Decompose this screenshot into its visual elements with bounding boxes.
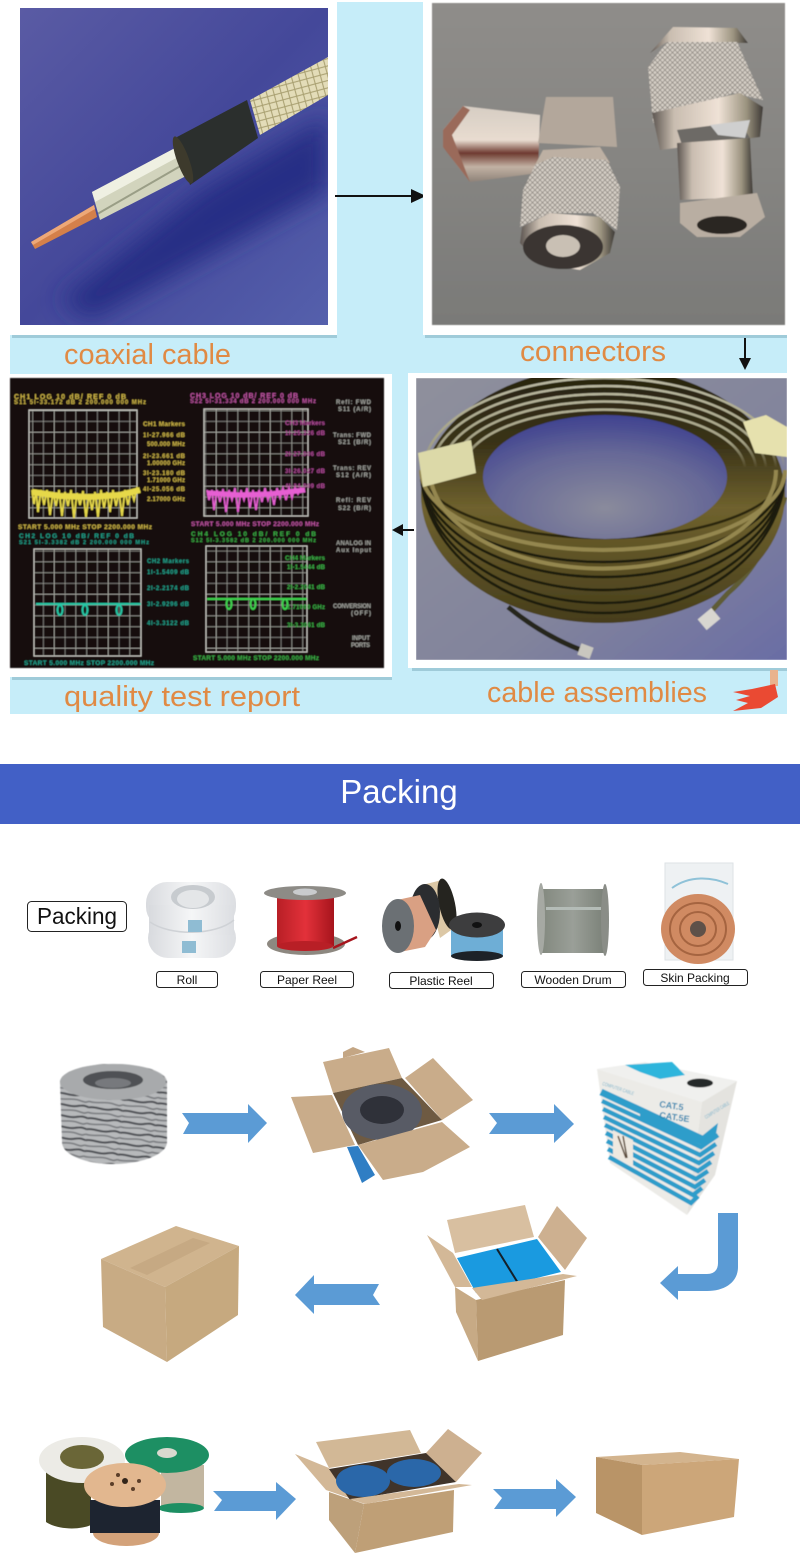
label: Plastic Reel xyxy=(390,972,494,988)
label: cable assemblies: cable assemblies xyxy=(487,677,707,709)
analyzer softkey menu: Trans: REV xyxy=(333,466,371,472)
analyzer softkey menu: (OFF) xyxy=(351,611,371,617)
icon: open box with blue cartons xyxy=(427,1205,587,1361)
icon: blue striped cat carton xyxy=(597,1062,737,1215)
icon: blue striped cat carton: COMPUTER CABLE xyxy=(704,1101,731,1121)
chart: channel 1 yellow trace: 500.000 MHz xyxy=(147,442,185,448)
icon: roll xyxy=(146,882,236,958)
panel: packing flow two xyxy=(39,1429,739,1553)
chart: channel 2 teal trace: S21 5I-3.3382 dB 2 200.000 000 MHz xyxy=(19,540,149,546)
chart: channel 4 green trace: 1.71000 GHz xyxy=(287,605,325,611)
label: Wooden Drum: Wooden Drum xyxy=(534,973,612,987)
chart: channel 3 magenta trace: S22 5I-31.334 dB 2 200.000 000 MHz xyxy=(190,399,316,405)
label: Skin Packing: Skin Packing xyxy=(660,971,730,985)
chart: channel 3 magenta trace: CH3 Markers xyxy=(285,420,325,427)
photo: coaxial cable xyxy=(20,8,328,325)
label: Packing tag: Packing xyxy=(37,903,117,929)
arrow: box to carton xyxy=(493,1479,576,1517)
chart: channel 1 yellow trace: 1.71000 GHz xyxy=(147,478,185,484)
chart: channel 2 teal trace: CH2 LOG 10 dB/ REF 0 dB xyxy=(19,533,134,540)
chart: channel 2 teal trace: 1I-1.5409 dB xyxy=(147,570,190,576)
icon: blue striped cat carton: CAT.5E xyxy=(659,1110,690,1124)
chart: channel 1 yellow trace: 2I-23.661 dB xyxy=(143,454,186,460)
photo: analyzer screen xyxy=(10,378,384,668)
chart: channel 1 yellow trace: 4I-25.056 dB xyxy=(143,487,186,493)
analyzer softkey menu: CONVERSION xyxy=(333,604,371,610)
analyzer softkey menu: INPUT xyxy=(352,636,370,642)
chart: channel 3 magenta trace: CH3 LOG 10 dB/ REF 0 dB xyxy=(190,393,298,400)
analyzer softkey menu: S22 (B/R) xyxy=(338,506,371,512)
label: coaxial cable: coaxial cable xyxy=(64,339,231,371)
label: Plastic Reel: Plastic Reel xyxy=(409,974,473,988)
icon: blue striped cat carton: COMPUTER CABLE xyxy=(601,1081,635,1097)
analyzer softkey menu: Refl: FWD xyxy=(336,400,372,406)
chart: channel 2 teal trace: 4I-3.3122 dB xyxy=(147,621,190,627)
analyzer softkey menu: Trans: FWD xyxy=(333,433,372,439)
icon: paper reel xyxy=(264,886,357,955)
label: quality test report: quality test report xyxy=(64,681,300,713)
analyzer softkey menu: PORTS xyxy=(351,643,370,649)
arrow: connectors to assemblies xyxy=(739,338,751,370)
arrow: assemblies to test report xyxy=(392,524,414,536)
heading band: Packing xyxy=(0,764,800,824)
icon: closed box xyxy=(101,1226,239,1362)
arrow: curved from carton down xyxy=(660,1213,738,1300)
chart: channel 4 green trace: CH4 LOG 10 dB/ REF 0 dB xyxy=(191,531,316,538)
label: Skin Packing xyxy=(644,970,748,986)
panel: packing types xyxy=(28,863,748,988)
panel: coaxial cable xyxy=(10,0,337,371)
chart: channel 1 yellow trace: 1.00000 GHz xyxy=(147,461,185,467)
chart: channel 4 green trace: START 5.000 MHz STOP 2200.000 MHz xyxy=(193,655,320,662)
chart: channel 4 green trace xyxy=(191,531,326,662)
analyzer softkey menu: S12 (A/R) xyxy=(336,473,371,479)
chart: channel 4 green trace: 2I-2.2041 dB xyxy=(287,585,326,591)
icon: open box with coil xyxy=(291,1047,473,1183)
arrow: coil to box xyxy=(182,1104,267,1143)
chart: channel 3 magenta trace: 3I-26.027 dB xyxy=(285,469,326,475)
analyzer softkey menu: S21 (B/R) xyxy=(338,440,371,446)
panel: packing flow one xyxy=(60,1047,738,1362)
icon: skin packing xyxy=(661,863,735,964)
chart: channel 1 yellow trace: CH1 LOG 10 dB/ REF 0 dB xyxy=(14,394,126,401)
chart: channel 3 magenta trace: 1I-25.326 dB xyxy=(285,431,326,437)
arrow: cable to connectors xyxy=(335,189,426,203)
label: Paper Reel xyxy=(260,972,354,988)
chart: channel 1 yellow trace: 1I-27.966 dB xyxy=(143,433,186,439)
panel: connectors xyxy=(423,0,787,368)
arrow: box to cat carton xyxy=(489,1104,574,1143)
chart: channel 3 magenta trace xyxy=(190,393,326,528)
chart: channel 1 yellow trace: 2.17000 GHz xyxy=(147,497,185,503)
light blue process background xyxy=(10,2,787,714)
analyzer softkey menu: ANALOG IN xyxy=(336,541,371,547)
label: Wooden Drum xyxy=(522,972,626,988)
icon: wire coil xyxy=(60,1064,167,1164)
chart: channel 4 green trace: 3I-3.3061 dB xyxy=(287,623,326,629)
chart: channel 2 teal trace: CH2 Markers xyxy=(147,559,190,565)
icon: open box with reels xyxy=(295,1429,482,1553)
analyzer softkey menu: Aux Input xyxy=(336,548,371,554)
analyzer softkey menu: Refl: REV xyxy=(336,498,371,504)
photo: connectors xyxy=(432,3,785,325)
chart: channel 3 magenta trace: START 5.000 MHz STOP 2200.000 MHz xyxy=(191,521,320,528)
icon: assorted reels xyxy=(39,1437,209,1546)
heading band: Packing: Packing xyxy=(340,773,458,810)
chart: channel 2 teal trace: START 5.000 MHz STOP 2200.000 MHz xyxy=(24,660,155,667)
icon: pointing hand xyxy=(733,670,778,711)
chart: channel 3 magenta trace: 4I-24.009 dB xyxy=(285,484,326,490)
chart: channel 4 green trace: S12 5I-3.3582 dB 2 200.000 000 MHz xyxy=(191,538,316,544)
icon: blue striped cat carton: CAT.5 xyxy=(659,1099,684,1112)
chart: channel 1 yellow trace: CH1 Markers xyxy=(143,421,185,428)
chart: channel 4 green trace: CH4 Markers xyxy=(285,555,325,562)
chart: channel 1 yellow trace: START 5.000 MHz STOP 2200.000 MHz xyxy=(18,524,153,531)
photo: cable coil xyxy=(416,367,787,660)
icon: closed carton xyxy=(596,1452,739,1535)
label: connectors: connectors xyxy=(520,336,666,368)
icon: wooden drum xyxy=(537,883,609,956)
panel: quality test report xyxy=(10,374,392,713)
arrow: left to closed box xyxy=(295,1275,380,1314)
label: Roll xyxy=(156,972,218,988)
chart: channel 2 teal trace xyxy=(19,533,190,667)
chart: channel 1 yellow trace: 3I-23.180 dB xyxy=(143,471,186,477)
arrow: reels to box xyxy=(213,1482,296,1520)
icon: plastic reel xyxy=(382,877,505,961)
chart: channel 2 teal trace: 2I-2.2174 dB xyxy=(147,586,190,592)
panel: cable assemblies xyxy=(408,367,787,711)
label: Roll: Roll xyxy=(177,973,197,987)
chart: channel 1 yellow trace xyxy=(14,394,186,531)
label: Paper Reel: Paper Reel xyxy=(277,973,337,987)
chart: channel 4 green trace: 1I-1.5444 dB xyxy=(287,565,326,571)
chart: channel 1 yellow trace: S11 5I-33.172 dB 2 200.000 000 MHz xyxy=(14,400,146,406)
analyzer softkey menu xyxy=(333,400,372,649)
analyzer softkey menu: S11 (A/R) xyxy=(338,407,371,413)
chart: channel 2 teal trace: 3I-2.9296 dB xyxy=(147,602,190,608)
chart: channel 3 magenta trace: 2I-27.006 dB xyxy=(285,452,326,458)
